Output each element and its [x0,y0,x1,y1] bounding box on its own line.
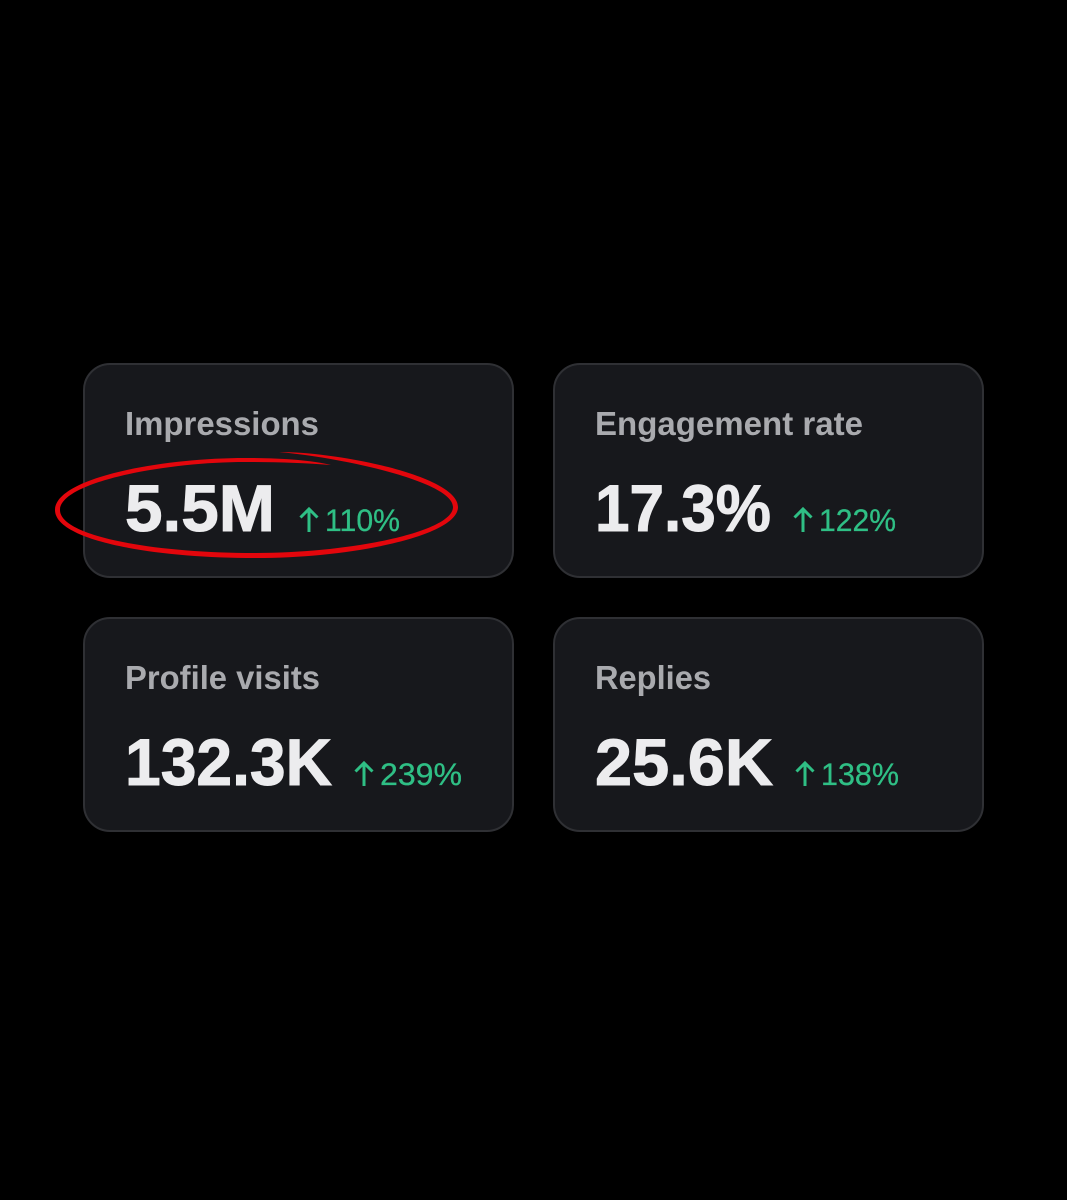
value: 132.3K: 132.3K [125,725,332,799]
icon: up arrow [796,763,814,786]
label: impressions: Impressions [125,405,319,442]
icon: up arrow [356,763,372,786]
change: 110%: 110% [325,502,400,538]
panel: profile visits [84,618,513,831]
panel: engagement rate [554,364,983,577]
label: engagement rate: Engagement rate [595,405,863,442]
label: replies: Replies [595,659,711,696]
panel: replies [554,618,983,831]
label: profile visits: Profile visits [125,659,320,696]
icon: up arrow [794,509,812,532]
change: 239%: 239% [380,756,462,792]
icon: up arrow [300,509,318,532]
value: 5.5M: 5.5M [125,471,275,545]
callout: red hand-drawn ellipse around 5.5M [55,452,458,558]
value: 17.3%: 17.3% [595,471,771,545]
change: 122%: 122% [819,502,896,538]
value: 25.6K: 25.6K [595,725,773,799]
change: 138%: 138% [821,756,899,792]
panel: impressions [84,364,513,577]
